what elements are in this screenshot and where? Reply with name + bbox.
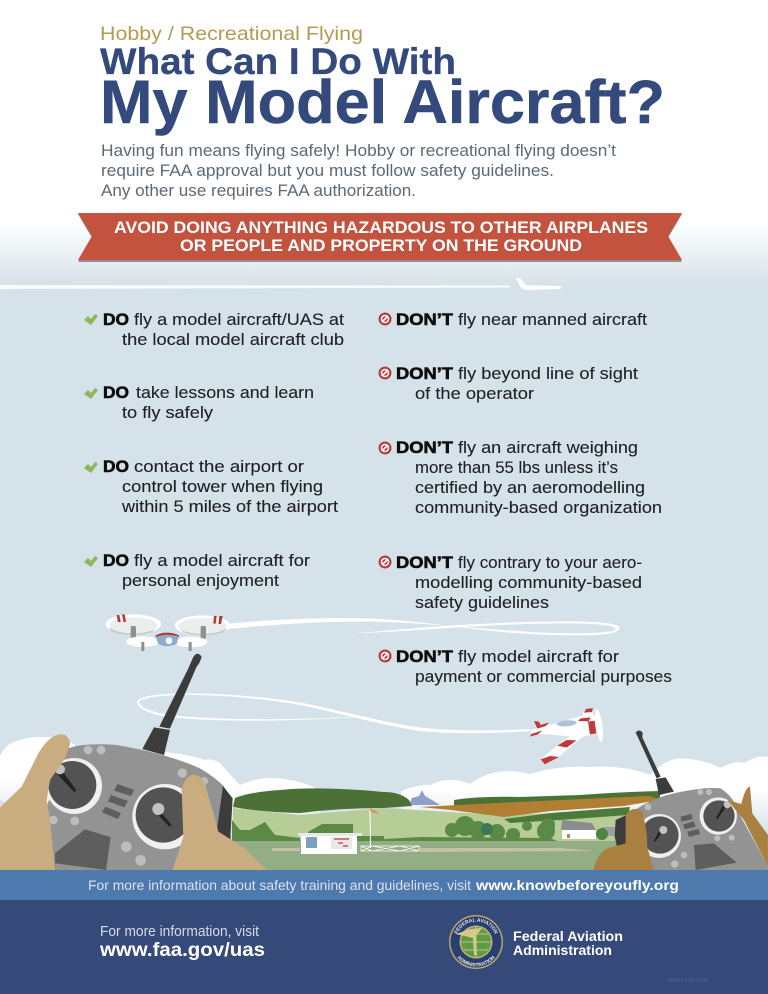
- distant city: [409, 790, 440, 805]
- do item 2: DO: [103, 383, 129, 402]
- do item 1: [84, 310, 344, 349]
- right hand: [173, 775, 267, 870]
- title line two: My Model Aircraft?: [100, 68, 665, 136]
- info bar: For more information about safety training and guidelines, visit: [88, 877, 471, 893]
- don't item 2: of the operator: [415, 384, 534, 403]
- don't item 3: community-based organization: [415, 498, 662, 517]
- dark tree line left: [233, 788, 384, 813]
- don't item 1: [378, 310, 647, 329]
- do item 3: [84, 457, 338, 516]
- footer panel: www.faa.gov/uas: [99, 939, 265, 961]
- do item 4: DO: [103, 551, 129, 570]
- do item 2: take lessons and learn: [136, 383, 314, 402]
- don't item 1: DON’T: [396, 310, 454, 329]
- don't item 4: DON’T: [396, 553, 454, 572]
- do item 1: fly a model aircraft/UAS at: [134, 310, 344, 329]
- quadcopter drone: [106, 614, 230, 651]
- footer panel: FA4002-LTR-1226: [666, 978, 708, 984]
- info bar: www.knowbeforeyoufly.org: [475, 877, 679, 893]
- list of do items: [84, 310, 344, 590]
- don't item 3: [378, 438, 662, 517]
- FAA seal: [449, 915, 503, 969]
- do item 4: fly a model aircraft for: [134, 551, 310, 570]
- don't item 4: safety guidelines: [415, 593, 549, 612]
- footer panel: [0, 900, 768, 994]
- don't item 3: more than 55 lbs unless it’s: [415, 458, 618, 477]
- plane trail loop: [137, 694, 530, 733]
- do item 3: control tower when flying: [122, 477, 323, 496]
- landscape: [232, 788, 662, 870]
- FAA seal: ADMINISTRATION: [457, 956, 495, 966]
- left hand: [0, 734, 70, 870]
- right transmitter with hands: [593, 730, 768, 870]
- don't item 1: fly near manned aircraft: [458, 310, 647, 329]
- don't item 3: certified by an aeromodelling: [415, 478, 645, 497]
- do item 3: DO: [103, 457, 129, 476]
- list of don't items: [378, 310, 672, 686]
- red warning banner: OR PEOPLE AND PROPERTY ON THE GROUND: [180, 237, 582, 255]
- left transmitter with hands: [0, 654, 267, 870]
- green band under brown field: [504, 807, 630, 823]
- don't item 2: fly beyond line of sight: [458, 364, 638, 383]
- jet airliner and contrail: [0, 278, 562, 290]
- left hand: [593, 809, 653, 870]
- don't item 3: fly an aircraft weighing: [458, 438, 638, 457]
- do item 3: contact the airport or: [134, 457, 304, 476]
- don't item 5: fly model aircraft for: [458, 647, 619, 666]
- FAA seal: FEDERAL AVIATION: [454, 918, 498, 934]
- brown field: [420, 796, 660, 817]
- plane: [530, 707, 605, 764]
- footer panel: Administration: [513, 943, 612, 958]
- body: [616, 788, 768, 870]
- don't item 2: DON’T: [396, 364, 454, 383]
- intro text: [101, 141, 616, 200]
- don't item 4: modelling community-based: [415, 573, 642, 592]
- don't item 2: [378, 364, 638, 403]
- do item 4: personal enjoyment: [122, 571, 279, 590]
- do item 2: to fly safely: [122, 403, 214, 422]
- runway: [272, 848, 594, 852]
- info bar: [0, 870, 768, 900]
- don't item 4: [378, 553, 642, 612]
- don't item 3: DON’T: [396, 438, 454, 457]
- right hand: [727, 787, 768, 867]
- do item 1: the local model aircraft club: [122, 330, 344, 349]
- don't item 5: payment or commercial purposes: [415, 667, 672, 686]
- red warning banner: AVOID DOING ANYTHING HAZARDOUS TO OTHER AIRPLANES: [114, 219, 648, 237]
- drone trail: [228, 618, 620, 635]
- do item 4: [84, 551, 310, 590]
- footer panel: For more information, visit: [100, 924, 259, 940]
- do item 1: DO: [103, 310, 129, 329]
- subtitle: Hobby / Recreational Flying: [100, 23, 363, 45]
- windsock: [370, 808, 380, 848]
- clouds: [0, 737, 768, 830]
- footer panel: Federal Aviation: [513, 929, 623, 944]
- antenna: [636, 730, 661, 778]
- title line one: What Can I Do With: [100, 41, 456, 82]
- intro text: Having fun means flying safely! Hobby or recreational flying doesn’t: [101, 141, 616, 160]
- red warning banner: [78, 213, 682, 262]
- ground: [232, 841, 662, 870]
- body: [47, 744, 232, 870]
- dark tree line right: [384, 791, 660, 808]
- don't item 4: fly contrary to your aero-: [458, 553, 642, 572]
- farmhouse: [561, 820, 620, 840]
- runway fence: [361, 846, 419, 851]
- do item 2: [84, 383, 314, 422]
- light green fields: [233, 808, 640, 845]
- antenna: [159, 654, 202, 728]
- hangar: [298, 833, 362, 854]
- copses: [232, 816, 560, 842]
- don't item 5: DON’T: [396, 647, 454, 666]
- intro text: Any other use requires FAA authorization.: [101, 181, 416, 200]
- intro text: require FAA approval but you must follow safety guidelines.: [101, 161, 554, 180]
- do item 3: within 5 miles of the airport: [121, 497, 338, 516]
- don't item 5: [378, 647, 672, 686]
